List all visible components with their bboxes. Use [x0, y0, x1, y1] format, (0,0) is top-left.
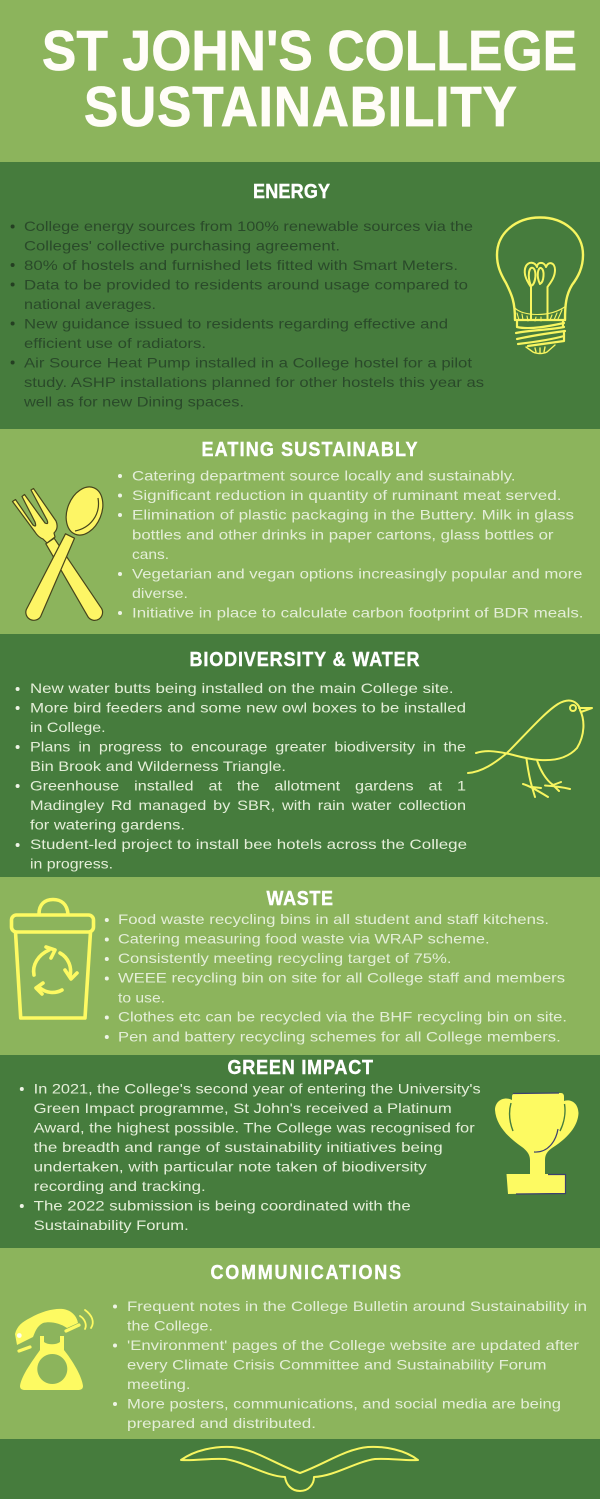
- title: ST JOHN'S COLLEGE: [42, 20, 577, 83]
- bullet list: energy: [11, 218, 484, 410]
- bullet list: waste: [105, 911, 567, 1044]
- heading: waste: WASTE: [266, 888, 333, 910]
- bullet list: eating: bottles and other drinks in paper cartons, glass bottles or: [132, 526, 554, 542]
- bullet list: green impact: the breadth and range of sustainability initiatives being: [34, 1139, 443, 1155]
- bullet list: green impact: undertaken, with particular note taken of biodiversity: [34, 1159, 427, 1175]
- bullet list: waste: Clothes etc can be recycled via the BHF recycling bin on site.: [118, 1009, 567, 1025]
- bullet list: eating: Significant reduction in quantity of ruminant meat served.: [132, 487, 562, 503]
- bullet list: communications: every Climate Crisis Committee and Sustainability Forum: [127, 1357, 546, 1373]
- bullet list: waste: Pen and battery recycling schemes for all College members.: [118, 1028, 561, 1044]
- heading: biodiversity and water: BIODIVERSITY & WATER: [190, 649, 420, 671]
- panel: eating sustainably: [0, 429, 600, 634]
- bullet list: waste: Catering measuring food waste via WRAP scheme.: [118, 931, 490, 947]
- bullet list: energy: Data to be provided to residents around usage compared to: [24, 276, 468, 292]
- bullet list: energy: national averages.: [24, 296, 156, 312]
- bullet list: green impact: The 2022 submission is being coordinated with the: [34, 1197, 411, 1213]
- panel: green impact: [0, 1055, 600, 1248]
- bullet list: energy: New guidance issued to residents regarding effective and: [24, 316, 448, 332]
- bullet list: communications: More posters, communications, and social media are being: [127, 1395, 561, 1411]
- panel: biodiversity and water: [0, 634, 600, 877]
- bullet list: green impact: [20, 1080, 481, 1233]
- heading: eating sustainably: EATING SUSTAINABLY: [202, 439, 418, 461]
- bullet list: communications: [113, 1298, 587, 1431]
- bullet list: energy: efficient use of radiators.: [24, 335, 206, 351]
- bullet list: energy: 80% of hostels and furnished lets fitted with Smart Meters.: [24, 257, 458, 273]
- icon: bird: [468, 701, 592, 797]
- icon: fork and spoon: [12, 481, 110, 620]
- bullet list: biodiversity: in progress.: [30, 856, 113, 872]
- bullet list: waste: Consistently meeting recycling target of 75%.: [118, 950, 452, 966]
- bullet list: green impact: recording and tracking.: [34, 1178, 206, 1194]
- bullet list: biodiversity: in College.: [30, 719, 106, 735]
- heading: energy: ENERGY: [253, 181, 330, 203]
- bullet list: communications: prepared and distributed.: [127, 1415, 316, 1431]
- bullet list: energy: College energy sources from 100% renewable sources via the: [24, 218, 473, 234]
- bullet list: biodiversity: Madingley Rd managed by SBR, with rain water collection: [30, 797, 466, 813]
- bullet list: energy: study. ASHP installations planned for other hostels this year as: [24, 374, 484, 390]
- bullet list: eating: Catering department source locally and sustainably.: [132, 468, 516, 484]
- heading: green impact: GREEN IMPACT: [228, 1057, 373, 1079]
- bullet list: biodiversity: New water butts being installed on the main College site.: [30, 680, 454, 696]
- bullet list: eating: [118, 468, 584, 620]
- title: [42, 20, 577, 139]
- bullet list: communications: 'Environment' pages of the College website are updated after: [127, 1337, 579, 1353]
- title: SUSTAINABILITY: [84, 76, 517, 139]
- bullet list: energy: Colleges' collective purchasing agreement.: [24, 238, 340, 254]
- panel: header: [0, 0, 600, 162]
- panel: energy: [0, 162, 600, 429]
- panel: communications: [0, 1248, 600, 1439]
- panel: footer: [0, 1439, 600, 1499]
- bullet list: eating: Vegetarian and vegan options increasingly popular and more: [132, 566, 583, 582]
- heading: communications: COMMUNICATIONS: [210, 1262, 401, 1284]
- bullet list: biodiversity: Bin Brook and Wilderness Triangle.: [30, 758, 286, 774]
- bullet list: communications: meeting.: [127, 1376, 190, 1392]
- bullet list: energy: well as for new Dining spaces.: [23, 394, 244, 410]
- bullet list: biodiversity: for watering gardens.: [30, 817, 185, 833]
- bullet list: energy: Air Source Heat Pump installed in a College hostel for a pilot: [24, 354, 472, 370]
- bullet list: waste: WEEE recycling bin on site for all College staff and members: [118, 970, 565, 986]
- bullet list: communications: Frequent notes in the College Bulletin around Sustainability in: [127, 1298, 587, 1314]
- bullet list: biodiversity: [16, 680, 467, 872]
- bullet list: eating: Initiative in place to calculate carbon footprint of BDR meals.: [132, 604, 584, 620]
- bullet list: biodiversity: Student-led project to install bee hotels across the College: [30, 836, 467, 852]
- bullet list: eating: diverse.: [132, 585, 188, 601]
- bullet list: eating: cans.: [132, 546, 169, 562]
- bullet list: green impact: In 2021, the College's second year of entering the University's: [34, 1080, 481, 1096]
- bullet list: waste: Food waste recycling bins in all student and staff kitchens.: [118, 911, 549, 927]
- bullet list: waste: to use.: [118, 989, 165, 1005]
- bullet list: eating: Elimination of plastic packaging in the Buttery. Milk in glass: [132, 507, 574, 523]
- icon: recycling bin: [12, 900, 94, 1018]
- bullet list: biodiversity: Plans in progress to encourage greater biodiversity in the: [30, 738, 466, 754]
- bullet list: green impact: Green Impact programme, St John's received a Platinum: [34, 1100, 452, 1116]
- bullet list: green impact: Sustainability Forum.: [34, 1217, 189, 1233]
- bullet list: biodiversity: More bird feeders and some new owl boxes to be installed: [30, 699, 466, 715]
- icon: trophy: [495, 1093, 578, 1194]
- bullet list: communications: the College.: [127, 1318, 213, 1334]
- icon: light bulb: [497, 218, 583, 354]
- bullet list: green impact: Award, the highest possible. The College was recognised for: [34, 1120, 475, 1136]
- panel: waste: [0, 877, 600, 1055]
- icon: telephone: [15, 1309, 93, 1390]
- icon: flying bird: [181, 1447, 418, 1491]
- bullet list: biodiversity: Greenhouse installed at the allotment gardens at 1: [30, 778, 466, 794]
